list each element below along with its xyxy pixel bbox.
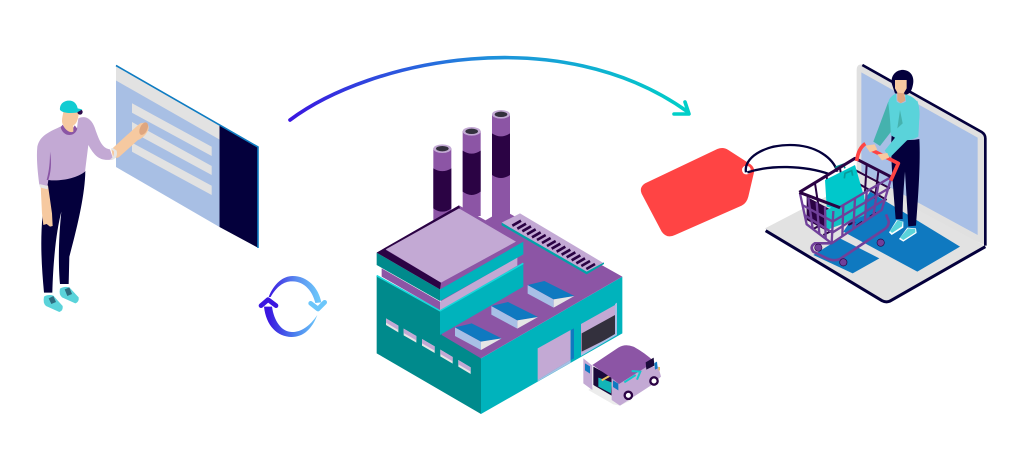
laptop: trackpad [813, 238, 879, 273]
shopper: far arm [873, 102, 895, 146]
shopper legs [889, 135, 920, 242]
cart: rim [799, 158, 894, 208]
panel: interface screen [116, 65, 258, 248]
factory: walls and roof [377, 210, 622, 414]
shopper: sweater [888, 93, 919, 140]
cart: bag [825, 164, 864, 209]
cart: back wires [813, 165, 890, 235]
factory: door [538, 328, 574, 381]
arrow: curved flow [290, 58, 689, 120]
price tag [641, 148, 754, 236]
shopper: trousers [891, 135, 920, 226]
price tag and laptop [641, 64, 986, 302]
shopper: hair [892, 70, 913, 95]
cart: teal box [826, 193, 866, 230]
factory: windows [386, 318, 471, 374]
shopper: hands [865, 144, 889, 160]
figure: shoes [44, 287, 79, 312]
figure: trousers [41, 171, 85, 293]
icon: cycle arrows [261, 276, 325, 337]
factory [377, 110, 622, 414]
cart: basket wires [800, 177, 892, 243]
van [583, 345, 661, 406]
cart: dark box [807, 197, 833, 230]
factory: roof vent [502, 213, 604, 274]
shopping cart [799, 144, 898, 266]
shopper: face [895, 80, 907, 101]
cart: red handle [857, 144, 898, 181]
laptop [765, 64, 986, 302]
figure: man pointing at screen [37, 101, 150, 312]
tag string [746, 145, 837, 174]
figure: pointing arm [111, 123, 149, 158]
van: parcel [598, 378, 612, 393]
figure: head [62, 112, 79, 132]
figure: cap [60, 101, 82, 113]
factory: skylights [455, 281, 574, 350]
shopper: near arm [885, 101, 920, 157]
shopper: upper body [873, 70, 920, 157]
shopper: shoes [889, 220, 917, 242]
figure: sweater [37, 117, 113, 187]
laptop: keyboard [843, 192, 960, 272]
factory: garage [581, 303, 617, 356]
cart: wheels [815, 239, 884, 266]
figure: left hand [41, 185, 53, 227]
cart: undercarriage [812, 214, 889, 260]
factory: upper block [377, 205, 523, 335]
factory: chimneys [433, 110, 510, 226]
